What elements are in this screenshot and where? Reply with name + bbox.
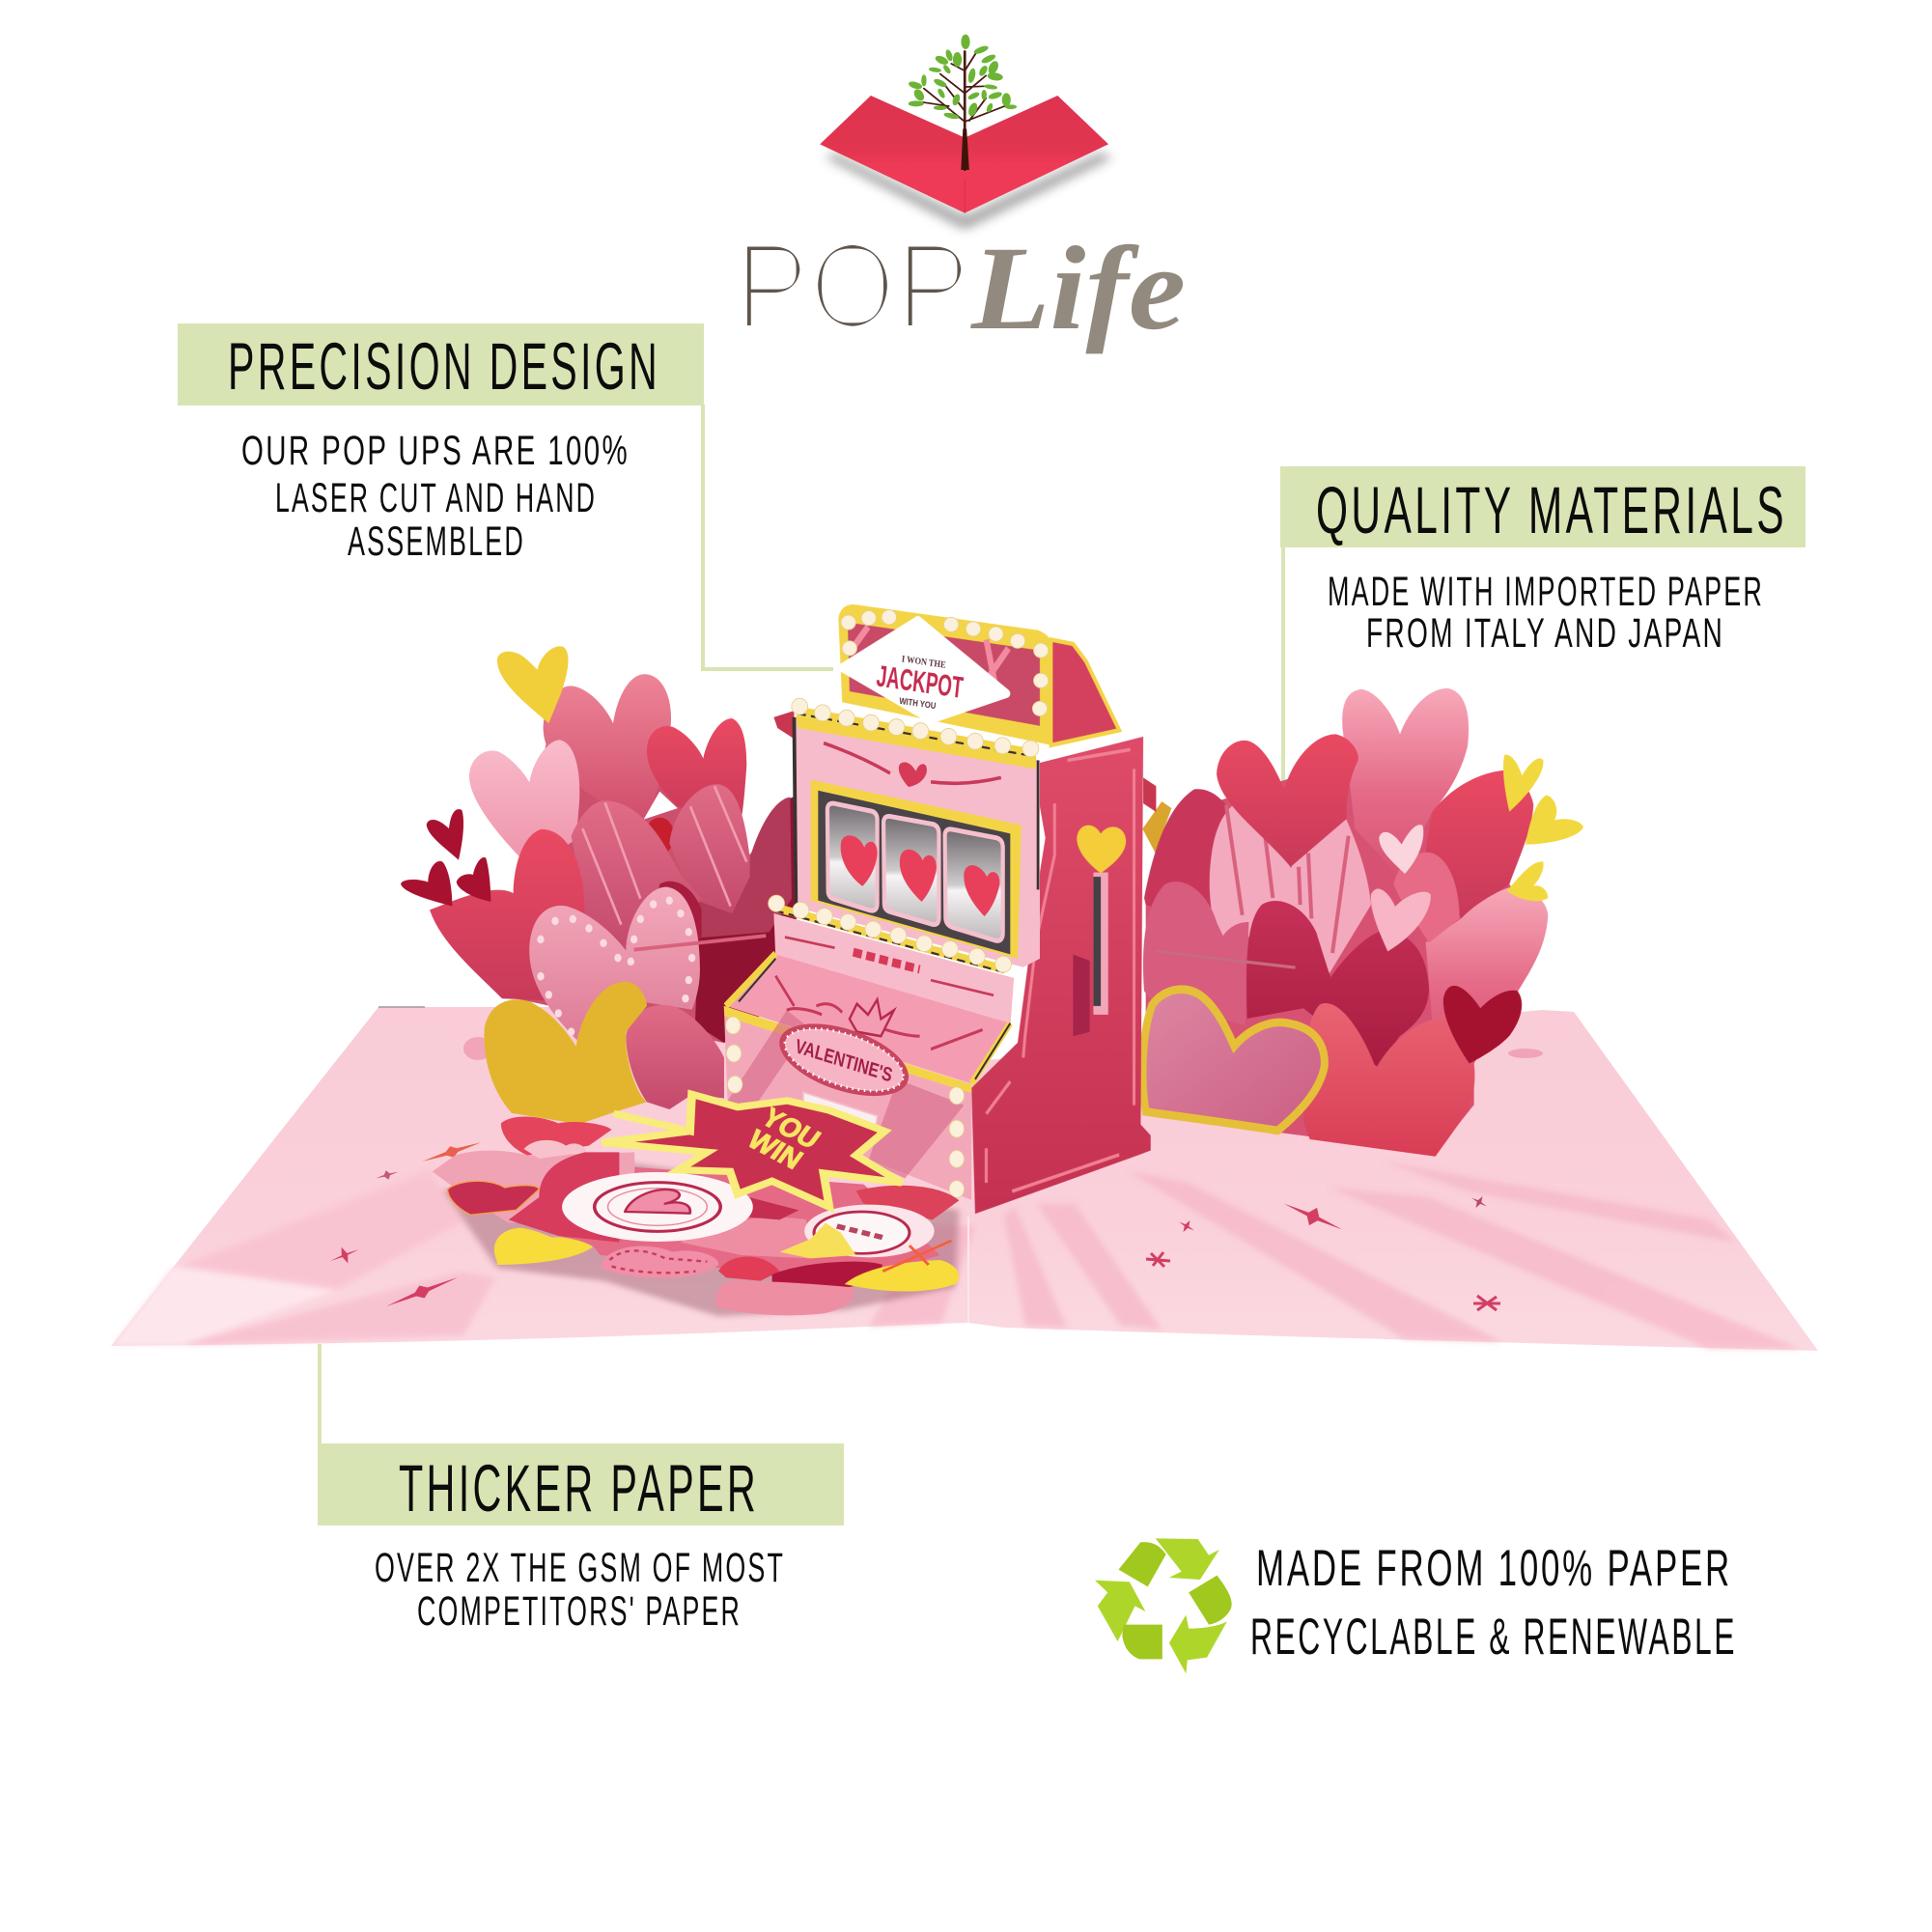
text block: thicker paper description: COMPETITORS' PAPER	[417, 1588, 742, 1635]
heading bar: quality materials	[1280, 466, 1806, 547]
hearts: right cluster	[1142, 688, 1583, 1157]
Happy Valentine's sign	[772, 1010, 915, 1110]
machine upper cabinet	[773, 711, 1040, 967]
text block: made from 100% paper	[1250, 1540, 1737, 1666]
text block: quality materials description: FROM ITALY AND JAPAN	[1366, 610, 1724, 657]
hearts: left cluster	[401, 646, 798, 1124]
text block: precision design description	[241, 428, 630, 565]
heading bar: precision design	[178, 323, 704, 406]
heading bar: precision design: PRECISION DESIGN	[228, 329, 660, 404]
machine side panel	[971, 737, 1157, 1214]
text block: quality materials description	[1328, 569, 1764, 657]
panel: thicker paper	[318, 1443, 844, 1635]
card floor	[111, 1007, 1818, 1351]
poker chip: small	[804, 1205, 935, 1257]
heading bar: thicker paper: THICKER PAPER	[399, 1451, 759, 1526]
text block: thicker paper description: OVER 2X THE GSM OF MOST	[375, 1545, 785, 1591]
text block: precision design description: OUR POP UPS ARE 100%	[241, 428, 630, 474]
logo: Pop Life	[735, 35, 1186, 354]
text block: precision design description: ASSEMBLED	[348, 518, 525, 565]
text block: precision design description: LASER CUT AND HAND	[275, 475, 597, 521]
poker chip: large	[562, 1172, 753, 1242]
logo word: POP: POP	[735, 217, 970, 354]
machine top sign	[838, 604, 1052, 745]
starburst: you win: WIN	[742, 1125, 808, 1175]
machine top sign: I WON THE	[901, 654, 946, 670]
panel: precision design	[178, 323, 704, 565]
icon: recycling arrows	[1095, 1538, 1232, 1673]
slot reels	[827, 803, 1003, 940]
machine top sign: WITH YOU	[899, 695, 937, 711]
illustration: pop-up card	[111, 604, 1818, 1351]
machine marquee bulbs	[726, 610, 1049, 1198]
text block: thicker paper description	[375, 1545, 785, 1635]
icon: open book with tree	[820, 35, 1110, 230]
starburst: you win: YOU	[756, 1103, 826, 1155]
heading bar: thicker paper	[318, 1443, 844, 1526]
panel: recyclable	[1095, 1538, 1737, 1673]
machine rear fin	[1050, 639, 1119, 745]
starburst: you win	[602, 1094, 902, 1207]
slot machine	[724, 604, 1157, 1214]
machine top sign: JACKPOT	[875, 660, 965, 706]
Happy Valentine's sign: VALENTINE'S	[793, 1036, 894, 1087]
panel: quality materials	[1280, 466, 1806, 657]
pile of hearts and poker chips	[433, 1094, 959, 1316]
green connector lines	[318, 405, 1285, 1444]
floor sparkles	[327, 1136, 1500, 1312]
logo word: Life: Life	[970, 222, 1186, 354]
machine lower cabinet	[724, 913, 1014, 1200]
